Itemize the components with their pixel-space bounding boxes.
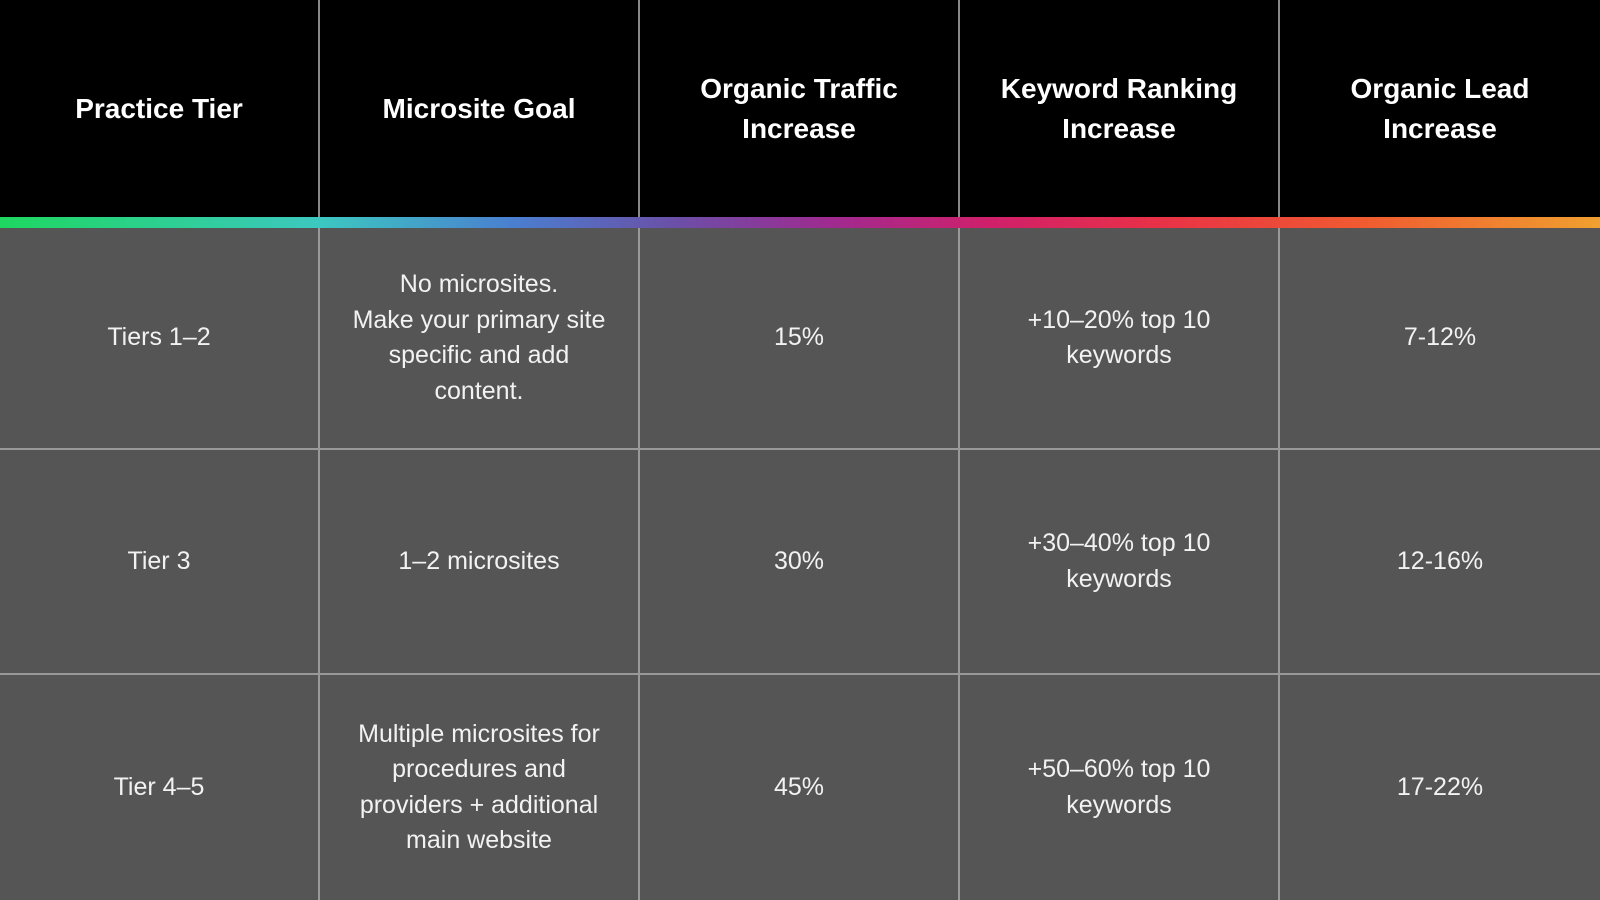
header: organic lead bbox=[1280, 0, 1600, 217]
cell bbox=[640, 675, 960, 900]
cell: keywords bbox=[1066, 564, 1172, 592]
cell: keywords bbox=[1066, 790, 1172, 818]
cell: Tier 4–5 bbox=[114, 773, 204, 801]
header: organic traffic: Organic Traffic bbox=[700, 72, 898, 104]
cell bbox=[320, 228, 640, 450]
header: keyword ranking: Keyword Ranking bbox=[1001, 72, 1237, 104]
cell: keywords bbox=[1066, 341, 1172, 369]
header: organic traffic bbox=[640, 0, 960, 217]
gradient bar bbox=[0, 217, 1600, 228]
cell: specific and add bbox=[389, 341, 569, 369]
cell bbox=[0, 228, 320, 450]
cell: providers + additional bbox=[360, 790, 598, 818]
cell bbox=[320, 450, 640, 675]
cell bbox=[960, 450, 1280, 675]
cell: 12-16% bbox=[1397, 547, 1483, 575]
cell: Tier 3 bbox=[128, 547, 190, 575]
cell bbox=[0, 450, 320, 675]
cell: +30–40% top 10 bbox=[1028, 529, 1210, 557]
cell bbox=[1280, 228, 1600, 450]
cell: 45% bbox=[774, 773, 824, 801]
cell: procedures and bbox=[392, 755, 566, 783]
cell bbox=[960, 228, 1280, 450]
cell: 7-12% bbox=[1404, 323, 1476, 351]
cell: 30% bbox=[774, 547, 824, 575]
header row bbox=[0, 0, 1600, 217]
cell bbox=[1280, 450, 1600, 675]
cell bbox=[960, 675, 1280, 900]
row 1 bbox=[0, 228, 1600, 450]
cell: +50–60% top 10 bbox=[1028, 755, 1210, 783]
header: microsite goal: Microsite Goal bbox=[383, 92, 575, 124]
header: practice tier: Practice Tier bbox=[75, 92, 243, 124]
header: practice tier bbox=[0, 0, 320, 217]
cell bbox=[640, 450, 960, 675]
cell: 15% bbox=[774, 323, 824, 351]
header: keyword ranking bbox=[960, 0, 1280, 217]
cell: main website bbox=[406, 826, 552, 854]
cell: Multiple microsites for bbox=[358, 720, 600, 748]
cell: Make your primary site bbox=[353, 306, 605, 334]
cell bbox=[320, 675, 640, 900]
cell: Tiers 1–2 bbox=[107, 323, 211, 351]
header: keyword ranking: Increase bbox=[1062, 112, 1176, 144]
header: organic lead: Organic Lead bbox=[1351, 72, 1529, 104]
cell bbox=[1280, 675, 1600, 900]
header: microsite goal bbox=[320, 0, 640, 217]
header: organic traffic: Increase bbox=[742, 112, 856, 144]
cell: 1–2 microsites bbox=[398, 547, 560, 575]
cell: +10–20% top 10 bbox=[1028, 306, 1210, 334]
row 3 bbox=[114, 675, 1483, 900]
cell: 17-22% bbox=[1397, 773, 1483, 801]
cell bbox=[0, 675, 320, 900]
row 2 bbox=[0, 450, 1600, 675]
cell bbox=[640, 228, 960, 450]
header: organic lead: Increase bbox=[1383, 112, 1497, 144]
cell: content. bbox=[435, 376, 523, 404]
cell: No microsites. bbox=[400, 270, 558, 298]
